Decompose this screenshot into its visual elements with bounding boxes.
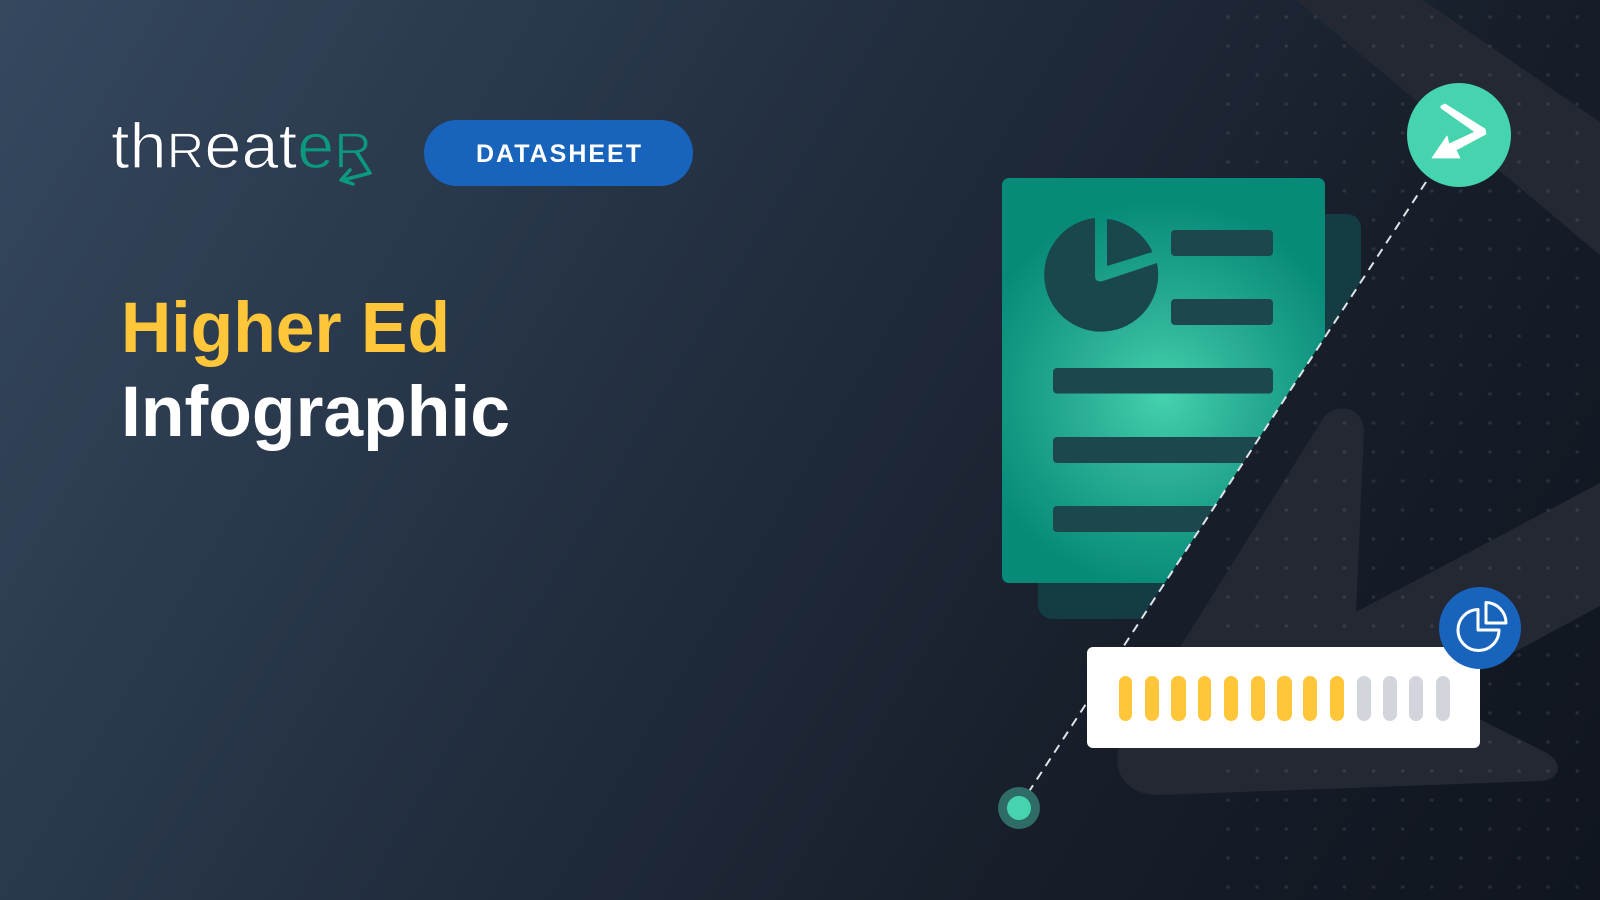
logo: threater: thReateR bbox=[111, 110, 372, 182]
text line bars bbox=[1053, 230, 1273, 532]
progress ticks bbox=[1119, 676, 1450, 721]
progress card bbox=[1087, 647, 1480, 748]
title: Higher Ed bbox=[121, 289, 450, 368]
pie chart icon bbox=[1044, 218, 1158, 332]
back page bbox=[1038, 214, 1361, 619]
icon: blue pie chart circle bbox=[1439, 587, 1521, 669]
badge: datasheet bbox=[424, 120, 693, 186]
dashed connector line bbox=[1028, 182, 1426, 793]
title: Infographic bbox=[121, 373, 510, 452]
badge: datasheet: DATASHEET bbox=[476, 140, 641, 168]
background logo arrow shapes bbox=[1117, 0, 1600, 795]
start node dot bbox=[998, 787, 1040, 829]
front page bbox=[1002, 178, 1325, 583]
dot grid pattern bbox=[1213, 2, 1600, 897]
document illustration bbox=[1002, 178, 1361, 619]
icon: teal arrow circle bbox=[1407, 83, 1511, 187]
logo arrow mark bbox=[341, 152, 370, 184]
title bbox=[121, 289, 510, 452]
